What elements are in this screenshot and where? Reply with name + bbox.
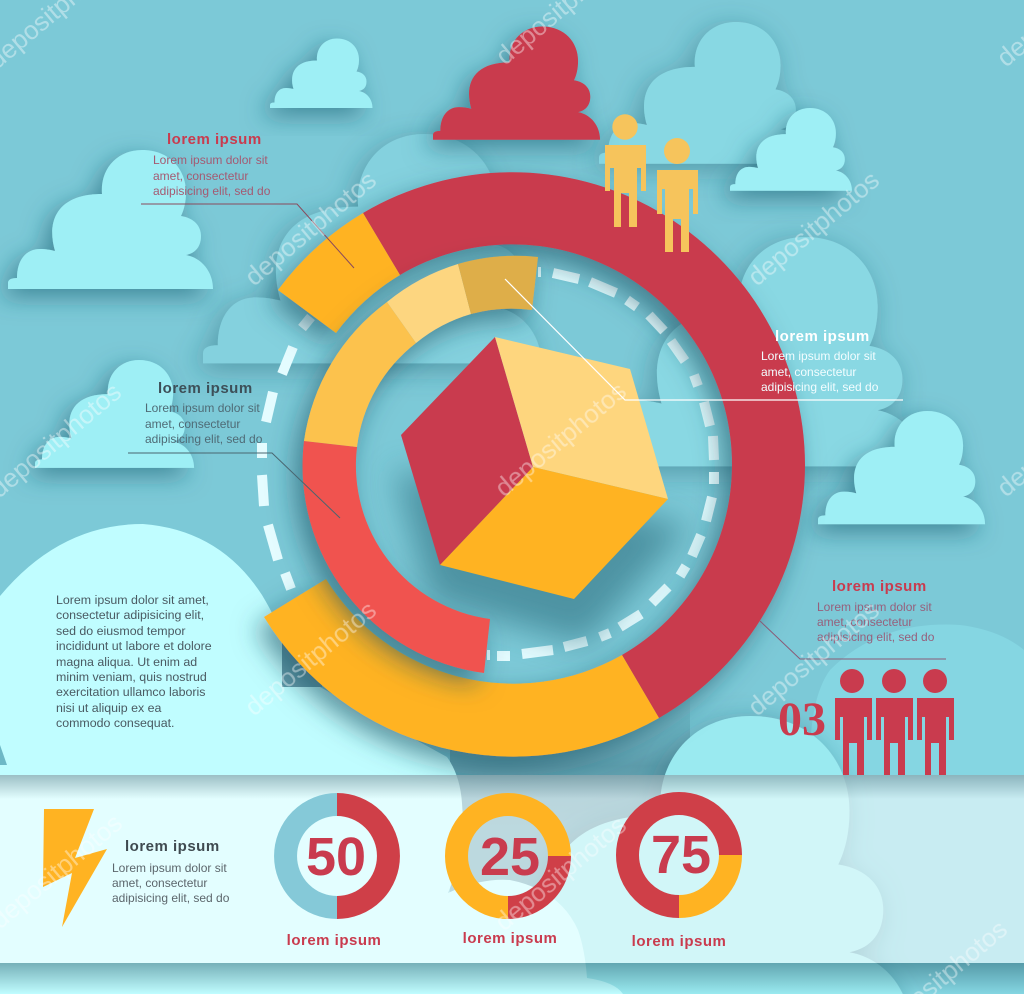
label: 75: lorem ipsum xyxy=(632,933,726,950)
text block: left paragraph xyxy=(56,593,212,730)
outer ring: yellow bottom segment xyxy=(264,579,659,757)
text block: lower right: amet, consectetur xyxy=(817,615,912,629)
text block: top-left: amet, consectetur xyxy=(153,169,248,183)
text block: panel: adipisicing elit, sed do xyxy=(112,891,230,905)
cloud: small top xyxy=(270,38,372,108)
pointer line: top-left label xyxy=(141,204,354,268)
text block: panel: amet, consectetur xyxy=(112,876,207,890)
panel: bottom strip xyxy=(0,775,1024,994)
text block: lower right: lorem ipsum xyxy=(832,578,927,595)
cloud: large lower centre xyxy=(449,716,910,994)
donut: 25: 25 xyxy=(480,827,540,887)
panel: inner top shadow xyxy=(0,775,1024,799)
text block: top-left xyxy=(153,131,271,198)
watermarks: depositphotos xyxy=(239,165,382,292)
text block: top-left: Lorem ipsum dolor sit xyxy=(153,153,268,167)
text block: left paragraph: minim veniam, quis nostrud xyxy=(56,670,207,684)
chart: outer ring xyxy=(264,172,805,757)
icon: two yellow people xyxy=(605,114,698,252)
text block: panel xyxy=(112,838,230,905)
cloud: small upper right xyxy=(730,108,852,191)
text block: left paragraph: nisi ut aliquip ex ea xyxy=(56,701,161,715)
panel: lower shadow band xyxy=(0,963,1024,994)
cloud: large lower right xyxy=(810,625,1024,994)
text block: left: amet, consectetur xyxy=(145,417,240,431)
text block: left paragraph: incididunt ut labore et dolore xyxy=(56,639,212,653)
text block: left paragraph: Lorem ipsum dolor sit amet, xyxy=(56,593,209,607)
label: 50: lorem ipsum xyxy=(287,932,381,949)
text block: right xyxy=(761,328,879,394)
cloud: red top xyxy=(433,26,600,140)
pointer line: cube to right label xyxy=(505,279,903,400)
text block: top-left: adipisicing elit, sed do xyxy=(153,184,271,198)
small teal notch xyxy=(0,745,7,765)
donut: 75: 75 xyxy=(651,825,711,885)
watermarks: depositphotos xyxy=(489,810,632,937)
pointer line: left label xyxy=(128,453,340,518)
donut: 50 xyxy=(286,804,388,908)
cloud: medium top right xyxy=(599,22,808,164)
watermarks: depositphotos xyxy=(742,595,885,722)
cloud: mid left xyxy=(35,360,194,468)
text block: left paragraph: consectetur adipisicing elit, xyxy=(56,608,204,622)
inner ring: coral segment xyxy=(303,441,490,673)
outer ring: yellow top-left segment xyxy=(278,213,400,333)
text block: left: adipisicing elit, sed do xyxy=(145,432,263,446)
icon: three red people xyxy=(835,669,954,775)
text block: panel: lorem ipsum xyxy=(125,838,220,855)
text block: panel: Lorem ipsum dolor sit xyxy=(112,861,227,875)
watermarks: depositphotos xyxy=(489,376,632,503)
inner ring: gold segment xyxy=(458,256,538,314)
shadow block under ring xyxy=(282,640,322,687)
text block: left: lorem ipsum xyxy=(158,380,253,397)
text block: lower right xyxy=(817,578,935,644)
watermarks: depositphotos xyxy=(239,595,382,722)
donut: 50: 50 xyxy=(306,827,366,887)
text block: right: amet, consectetur xyxy=(761,365,856,379)
outer ring: red segment xyxy=(363,172,805,718)
label: 25: lorem ipsum xyxy=(463,930,557,947)
icon: lightning bolt xyxy=(43,809,107,927)
text block: left paragraph: exercitation ullamco laboris xyxy=(56,685,205,699)
text block: left xyxy=(145,380,263,446)
inner ring: yellow segment xyxy=(304,302,416,447)
cloud: big left xyxy=(8,150,213,289)
text block: top-left: lorem ipsum xyxy=(167,131,262,148)
cloud: right xyxy=(818,411,985,524)
donut: 25 xyxy=(456,804,560,908)
shadow layer behind lower clouds xyxy=(450,690,690,994)
cloud: medium right behind ring xyxy=(584,237,922,466)
text block: lower right: adipisicing elit, sed do xyxy=(817,630,935,644)
number: 03: 03 xyxy=(778,693,826,746)
text block: lower right: Lorem ipsum dolor sit xyxy=(817,600,932,614)
text block: left paragraph: magna aliqua. Ut enim ad xyxy=(56,655,197,669)
chart: inner ring xyxy=(303,256,538,673)
text block: right: lorem ipsum xyxy=(775,328,870,345)
shadow around cube xyxy=(395,470,690,645)
cloud: medium left behind ring xyxy=(203,134,541,363)
cloud: pale lower left xyxy=(0,524,623,994)
watermarks: depositphotos xyxy=(742,165,885,292)
inner ring: light segment xyxy=(387,264,471,343)
text block: right: adipisicing elit, sed do xyxy=(761,380,879,394)
dashed ring xyxy=(262,272,714,656)
text block: left: Lorem ipsum dolor sit xyxy=(145,401,260,415)
text block: left paragraph: sed do eiusmod tempor xyxy=(56,624,186,638)
text block: right: Lorem ipsum dolor sit xyxy=(761,349,876,363)
pointer line: lower-right label xyxy=(760,621,946,659)
icon: cube xyxy=(401,337,668,599)
text block: left paragraph: commodo consequat. xyxy=(56,716,174,730)
donut: 75 xyxy=(628,804,730,906)
